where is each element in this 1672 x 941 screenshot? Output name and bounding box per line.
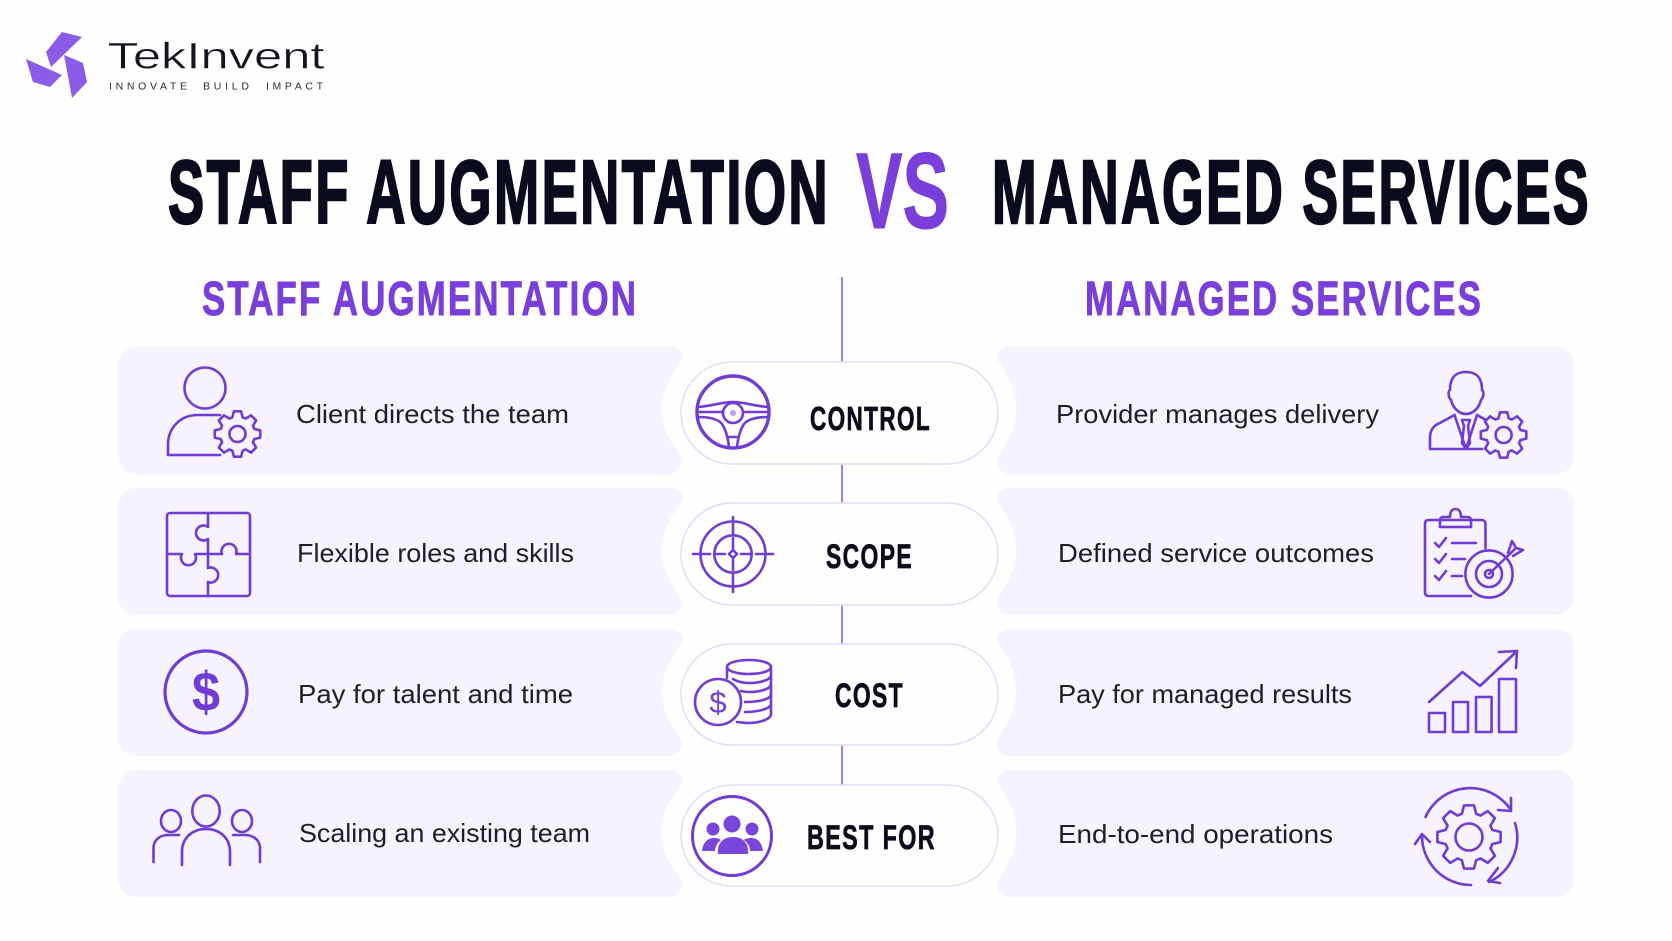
panel: pay for talent and time [118,629,683,756]
icon: puzzle [167,513,250,596]
icon: team outline [154,796,260,865]
text: Flexible roles and skills [297,538,574,568]
icon: gear with cycle arrows [1415,788,1517,885]
text: Scaling an existing team [299,818,590,848]
pill background [681,362,998,464]
pill background [681,503,998,605]
card background [118,770,683,897]
heading: managed services column: MANAGED SERVICES [1085,273,1483,326]
icon: rising bar chart [1429,651,1517,732]
card background [997,347,1574,474]
panel: flexible roles and skills [118,488,683,615]
pill: cost [681,644,998,745]
card background [997,629,1574,756]
pill: scope [681,503,998,605]
card background [997,770,1574,897]
icon: coins [695,660,771,725]
pill: control [681,362,998,464]
panel: pay for managed results [997,629,1574,756]
icon: crosshair target [693,517,773,592]
logo: TekInvent [26,32,325,98]
logo tagline: BUILD [203,80,249,92]
pill background [681,644,998,745]
icon: dollar circle [165,651,247,733]
card background [997,488,1574,615]
text: End-to-end operations [1058,819,1333,849]
title: staff augmentation: STAFF AUGMENTATION [168,143,830,243]
panel: defined service outcomes [997,488,1574,615]
icon: person with gear [168,368,260,457]
panel: end-to-end operations [997,770,1574,897]
title: vs: VS [856,130,949,251]
logo tagline [109,80,324,92]
logo wordmark: TekInvent [108,36,325,76]
pill background [681,785,998,886]
text: Provider manages delivery [1056,399,1379,429]
label: CONTROL [810,400,931,437]
icon: manager with gear [1430,372,1526,458]
panel: scaling an existing team [118,770,683,897]
icon: team in circle [692,796,772,876]
icon: steering wheel [697,376,769,448]
icon: clipboard with target [1425,509,1523,598]
label: COST [835,677,904,715]
panel: client directs the team [118,347,683,474]
heading: staff augmentation column: STAFF AUGMENTATION [202,273,638,326]
logo mark [26,32,87,98]
text: Pay for talent and time [298,679,573,709]
logo tagline: INNOVATE [109,80,187,92]
card background [118,347,683,474]
icon: dollar circle: $ [192,660,220,723]
label: BEST FOR [807,819,936,857]
text: Pay for managed results [1058,679,1352,709]
pill: best for [681,785,998,886]
text: Client directs the team [296,399,569,429]
label: SCOPE [826,538,913,576]
logo tagline: IMPACT [266,80,324,92]
text: Defined service outcomes [1058,538,1374,568]
icon: coins: $ [709,685,727,720]
panel: provider manages delivery [997,347,1574,474]
main title [168,130,1591,251]
card background [118,629,683,756]
card background [118,488,683,615]
